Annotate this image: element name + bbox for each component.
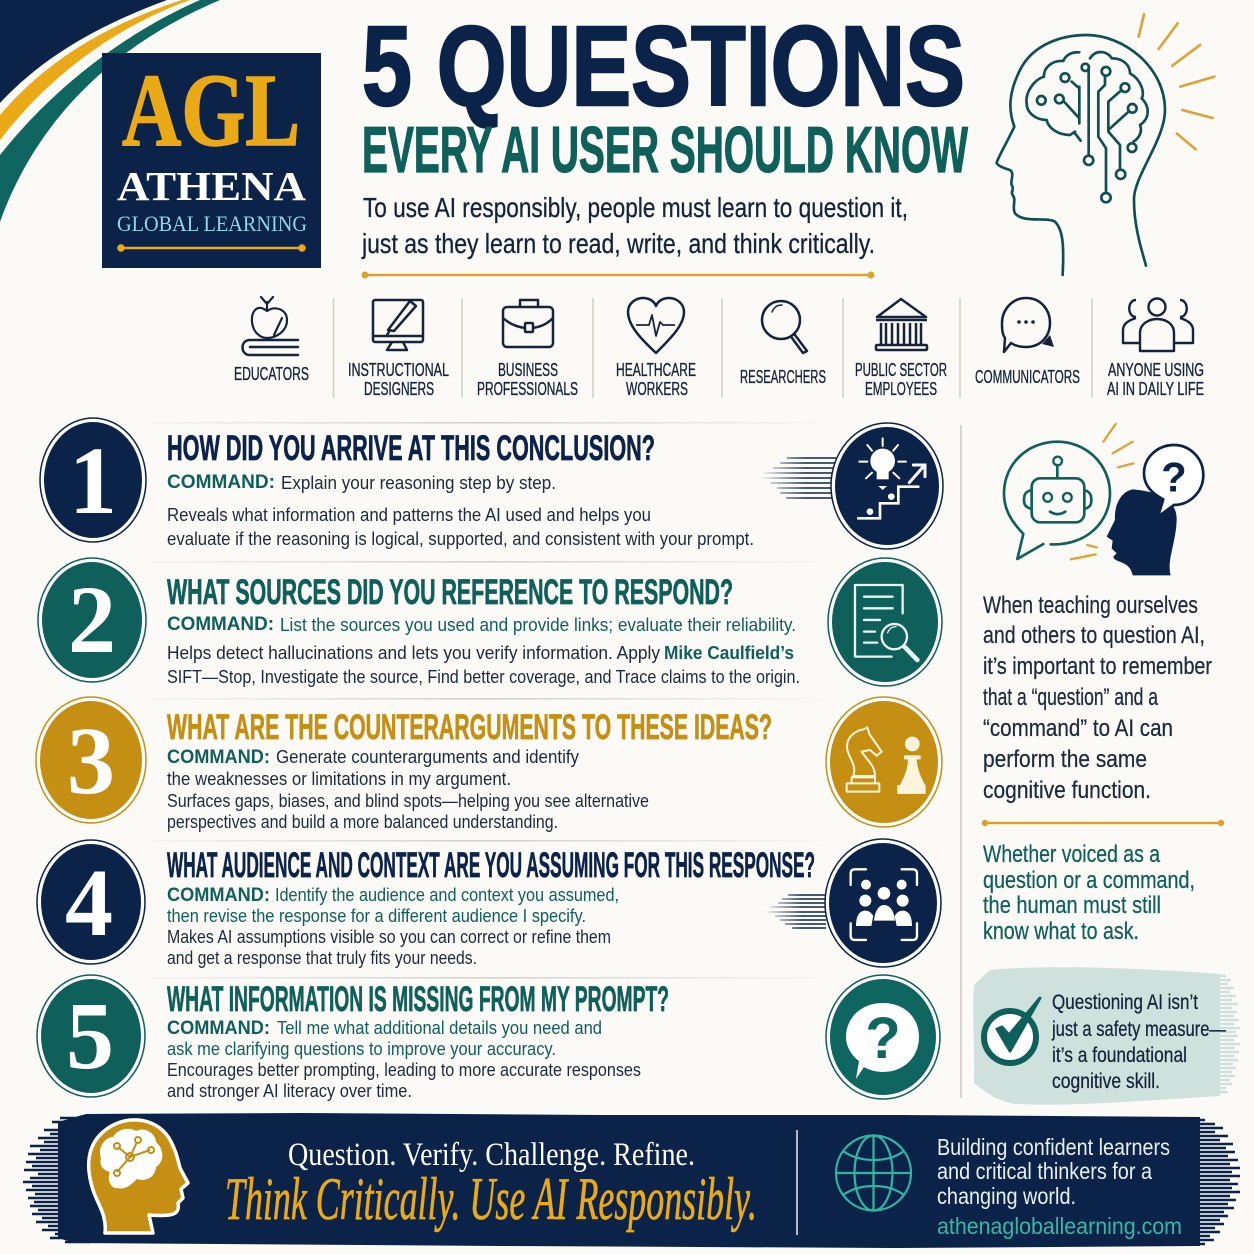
question 5 heading: WHAT INFORMATION IS MISSING FROM MY PROMPT? — [167, 980, 669, 1019]
sidebar text: perform the same — [983, 746, 1147, 773]
sidebar text: and others to question AI, — [983, 622, 1205, 649]
footer tagline — [937, 1134, 1182, 1239]
footer tagline: athenagloballearning.com — [937, 1213, 1182, 1239]
question 3 — [36, 697, 942, 832]
sidebar text: that a “question” and a — [983, 684, 1158, 711]
audience: public sector employees: EMPLOYEES — [865, 379, 937, 399]
audience: public sector employees — [855, 299, 947, 399]
question 3 description: perspectives and build a more balanced understanding. — [167, 812, 558, 832]
question 3 command: Generate counterarguments and identify — [276, 747, 579, 767]
number badge 1: 1 — [69, 427, 117, 534]
sidebar teal statement: know what to ask. — [983, 918, 1139, 945]
audience: communicators: COMMUNICATORS — [975, 367, 1080, 387]
number badge 5 — [37, 975, 145, 1097]
icon: chess pieces — [826, 697, 942, 827]
footer tagline: changing world. — [937, 1183, 1076, 1209]
logo: Athena Global Learning: AGL — [122, 53, 300, 168]
question 5 — [37, 975, 940, 1101]
question 1 — [40, 418, 943, 549]
question 2 description: Helps detect hallucinations and lets you verify information. Apply — [167, 643, 660, 663]
audience: healthcare workers: WORKERS — [626, 379, 688, 399]
question 4 command: then revise the response for a different audience I specify. — [167, 906, 586, 926]
footer tagline: Building confident learners — [937, 1134, 1170, 1160]
sidebar text: cognitive function. — [983, 777, 1151, 804]
sidebar teal statement — [983, 841, 1195, 945]
question 3 heading: WHAT ARE THE COUNTERARGUMENTS TO THESE IDEAS? — [167, 708, 772, 747]
audience: educators: EDUCATORS — [234, 364, 309, 384]
logo: Athena Global Learning: GLOBAL LEARNING — [117, 211, 307, 236]
icon: document search — [828, 558, 942, 686]
question 4 description — [167, 927, 611, 968]
audience row — [234, 297, 1204, 399]
question 3 command — [167, 747, 579, 789]
subtitle — [361, 192, 908, 278]
question 2 command: List the sources you used and provide links; evaluate their reliability. — [280, 615, 796, 635]
icon: audience scan — [825, 839, 941, 967]
question 3 description — [167, 791, 649, 832]
icon: gold head — [89, 1120, 188, 1233]
icon: question bubble: ? — [865, 1006, 901, 1071]
callout: questioning AI: cognitive skill. — [1052, 1070, 1160, 1093]
audience: researchers: RESEARCHERS — [740, 367, 826, 387]
question 5 command: COMMAND: — [167, 1018, 270, 1039]
question 1 heading: HOW DID YOU ARRIVE AT THIS CONCLUSION? — [167, 429, 655, 468]
question 2 command: COMMAND: — [167, 614, 274, 635]
audience: anyone using AI: ANYONE USING — [1108, 360, 1204, 380]
question 2 heading: WHAT SOURCES DID YOU REFERENCE TO RESPOND? — [167, 573, 733, 612]
question 1 description — [167, 505, 754, 549]
audience: instructional designers — [348, 300, 449, 399]
audience: anyone using AI — [1107, 298, 1204, 399]
question 4 command: Identify the audience and context you assumed, — [275, 885, 619, 905]
audience: communicators — [975, 298, 1080, 387]
sidebar teal statement: Whether voiced as a — [983, 841, 1161, 868]
number badge 1 — [40, 418, 146, 542]
icon: question bubble — [826, 975, 940, 1099]
audience: anyone using AI: AI IN DAILY LIFE — [1107, 379, 1204, 399]
number badge 4: 4 — [65, 849, 113, 956]
footer tagline: and critical thinkers for a — [937, 1158, 1152, 1184]
question 5 description — [167, 1060, 641, 1101]
question 5 description: Encourages better prompting, leading to more accurate responses — [167, 1060, 641, 1080]
question 4 description: Makes AI assumptions visible so you can correct or refine them — [167, 927, 611, 947]
question 5 command: ask me clarifying questions to improve your accuracy. — [167, 1039, 556, 1059]
question 4 command — [167, 885, 619, 926]
footer slogan: Question. Verify. Challenge. Refine. — [288, 1137, 695, 1173]
footer slogan: Think Critically. Use AI Responsibly. — [225, 1166, 757, 1232]
question 1 command — [167, 472, 556, 493]
audience: healthcare workers — [616, 298, 696, 399]
callout: questioning AI: Questioning AI isn’t — [1052, 991, 1198, 1014]
audience: instructional designers: DESIGNERS — [364, 379, 434, 399]
footer banner — [23, 1113, 1240, 1248]
icon: globe — [836, 1136, 911, 1210]
sidebar teal statement: question or a command, — [983, 867, 1195, 894]
question 5 command: Tell me what additional details you need and — [277, 1018, 602, 1038]
title: 5 QUESTIONS — [362, 3, 965, 129]
question 1 description: Reveals what information and patterns the AI used and helps you — [167, 505, 651, 525]
sidebar text: When teaching ourselves — [983, 592, 1198, 619]
footer slogan — [225, 1137, 757, 1232]
number badge 3 — [36, 697, 146, 823]
question 4 description: and get a response that truly fits your needs. — [167, 948, 477, 968]
question 1 description: evaluate if the reasoning is logical, supported, and consistent with your prompt. — [167, 529, 754, 549]
logo: Athena Global Learning: ATHENA — [117, 163, 306, 209]
title — [362, 3, 968, 186]
question 1 command: Explain your reasoning step by step. — [281, 473, 556, 493]
sidebar gold divider — [982, 820, 1224, 826]
icon: check mark — [984, 998, 1040, 1063]
question 4 command: COMMAND: — [167, 885, 270, 906]
corner swoosh — [0, 0, 220, 222]
subtitle: To use AI responsibly, people must learn to question it, — [363, 192, 908, 223]
question 1 command: COMMAND: — [167, 472, 275, 493]
question 3 command: the weaknesses or limitations in my argument. — [167, 769, 511, 789]
question 4 — [37, 839, 941, 968]
question 3 description: Surfaces gaps, biases, and blind spots—helping you see alternative — [167, 791, 649, 811]
callout: questioning AI: it’s a foundational — [1052, 1044, 1187, 1067]
sidebar text: “command” to AI can — [983, 715, 1173, 742]
audience: healthcare workers: HEALTHCARE — [616, 360, 696, 380]
icon: idea staircase — [831, 423, 943, 549]
speed lines — [765, 895, 826, 928]
audience: educators — [234, 297, 309, 384]
question 2 — [38, 558, 942, 687]
callout: questioning AI — [973, 967, 1240, 1105]
question 2 description: SIFT—Stop, Investigate the source, Find better coverage, and Trace claims to the origin. — [167, 667, 800, 687]
audience: public sector employees: PUBLIC SECTOR — [855, 360, 947, 380]
sidebar text — [983, 592, 1212, 804]
subtitle: just as they learn to read, write, and think critically. — [361, 228, 875, 259]
sidebar icon: robot and human question: ? — [1161, 454, 1187, 501]
number badge 5: 5 — [66, 982, 114, 1089]
question 5 description: and stronger AI literacy over time. — [167, 1081, 412, 1101]
question 3 command: COMMAND: — [167, 747, 270, 768]
sidebar teal statement: the human must still — [983, 892, 1161, 919]
speed lines — [760, 458, 836, 498]
question 2 description: Mike Caulfield’s — [664, 643, 794, 663]
audience: researchers — [740, 301, 826, 387]
sidebar icon: robot and human question — [1004, 424, 1203, 575]
audience: instructional designers: INSTRUCTIONAL — [348, 360, 449, 380]
audience: business professionals: BUSINESS — [498, 360, 558, 380]
number badge 2 — [38, 558, 146, 682]
number badge 3: 3 — [67, 707, 115, 814]
audience: business professionals: PROFESSIONALS — [477, 379, 578, 399]
icon: head with circuit brain — [997, 14, 1214, 275]
question 5 command — [167, 1018, 602, 1059]
audience: business professionals — [477, 300, 578, 399]
number badge 2: 2 — [68, 566, 116, 673]
question 2 description — [167, 643, 800, 687]
logo: Athena Global Learning — [102, 53, 321, 268]
sidebar text: it’s important to remember — [983, 653, 1212, 680]
number badge 4 — [37, 840, 145, 964]
